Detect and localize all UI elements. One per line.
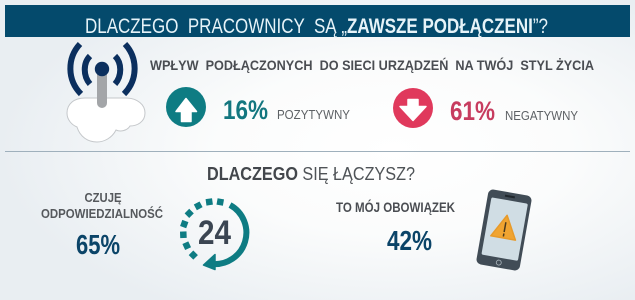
icon: up arrow	[166, 87, 206, 127]
title banner: DLACZEGO PRACOWNICY SĄ „ZAWSZE PODŁĄCZENI”?	[85, 15, 548, 38]
stat: responsibility 65%: 65%	[76, 229, 120, 260]
icon: 24 hour clock: 24	[198, 214, 231, 252]
icon: phone with warning	[476, 189, 532, 271]
stat: 16% positive: 16%	[223, 95, 268, 125]
icon: down arrow	[393, 88, 433, 128]
section heading: DLACZEGO SIĘ ŁĄCZYSZ?	[207, 163, 415, 184]
stat: duty 42%: TO MÓJ OBOWIĄZEK	[336, 200, 455, 215]
title banner	[5, 5, 630, 38]
icon: antenna on cloud	[67, 44, 145, 142]
subtitle: impact on lifestyle: WPŁYW PODŁĄCZONYCH DO SIECI URZĄDZEŃ NA TWÓJ STYL ŻYCIA	[150, 56, 594, 73]
stat: 61% negative	[450, 96, 578, 126]
stat: responsibility 65%: CZUJĘ	[84, 190, 122, 205]
stat: duty 42%	[336, 200, 455, 256]
stat: responsibility 65%	[41, 190, 164, 260]
stat: responsibility 65%: ODPOWIEDZIALNOŚĆ	[41, 206, 164, 221]
stat: 16% positive: POZYTYWNY	[277, 107, 350, 122]
stat: duty 42%: 42%	[387, 225, 432, 256]
stat: 16% positive	[223, 95, 350, 125]
stat: 61% negative: 61%	[450, 96, 495, 126]
stat: 61% negative: NEGATYWNY	[505, 108, 578, 123]
icon: 24 hour clock	[180, 198, 246, 270]
